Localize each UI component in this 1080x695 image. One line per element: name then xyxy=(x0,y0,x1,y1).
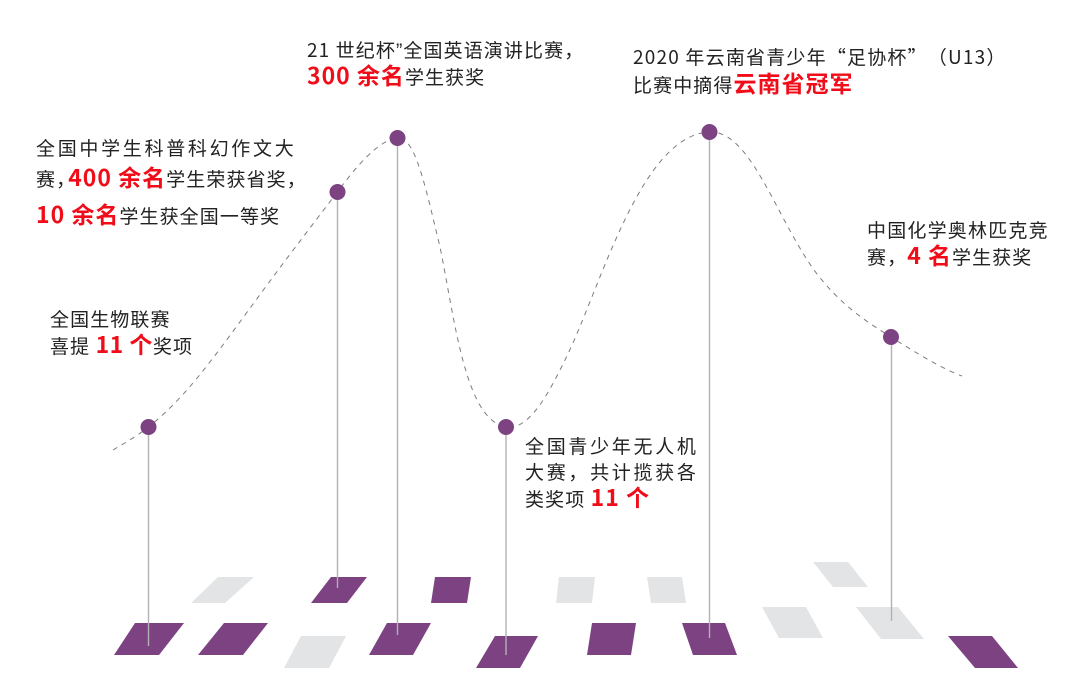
text: 无人机大赛: 类奖项 11 个 xyxy=(525,479,650,513)
text: 科普科幻作文大赛 xyxy=(36,134,307,230)
text: 科普科幻作文大赛: 10 余名学生获全国一等奖 xyxy=(36,196,280,230)
text: 无人机大赛: 大赛，共计揽获各 xyxy=(525,458,699,485)
text: 化学奥林匹克: 中国化学奥林匹克竞 xyxy=(867,216,1049,243)
stems: vertical lines from markers xyxy=(148,132,892,655)
dashed trend curve xyxy=(113,132,962,450)
text: 21世纪杯 xyxy=(307,36,584,91)
text: 化学奥林匹克: 赛，4 名学生获奖 xyxy=(867,237,1032,271)
text: 足协杯 xyxy=(633,43,1007,99)
text: 全国生物联赛: 全国生物联赛 xyxy=(50,305,171,332)
text: 足协杯: 2020 年云南省青少年“足协杯”（U13） xyxy=(633,43,1007,70)
text: 科普科幻作文大赛: 赛，400 余名学生荣获省奖， xyxy=(36,159,307,193)
text: 全国生物联赛: 喜提 11 个奖项 xyxy=(50,326,193,360)
text: 全国生物联赛 xyxy=(50,305,193,360)
tiles: floor parallelograms xyxy=(114,562,1018,668)
text: 无人机大赛: 全国青少年无人机 xyxy=(525,432,699,459)
text: 科普科幻作文大赛: 全国中学生科普科幻作文大 xyxy=(36,134,296,161)
markers: purple dots xyxy=(140,124,899,435)
text: 无人机大赛 xyxy=(525,432,699,513)
text: 21世纪杯: 300 余名学生获奖 xyxy=(307,57,485,91)
text: 足协杯: 比赛中摘得云南省冠军 xyxy=(633,65,854,99)
text: 21世纪杯: 21 世纪杯”全国英语演讲比赛， xyxy=(307,36,584,63)
text: 化学奥林匹克 xyxy=(867,216,1049,271)
